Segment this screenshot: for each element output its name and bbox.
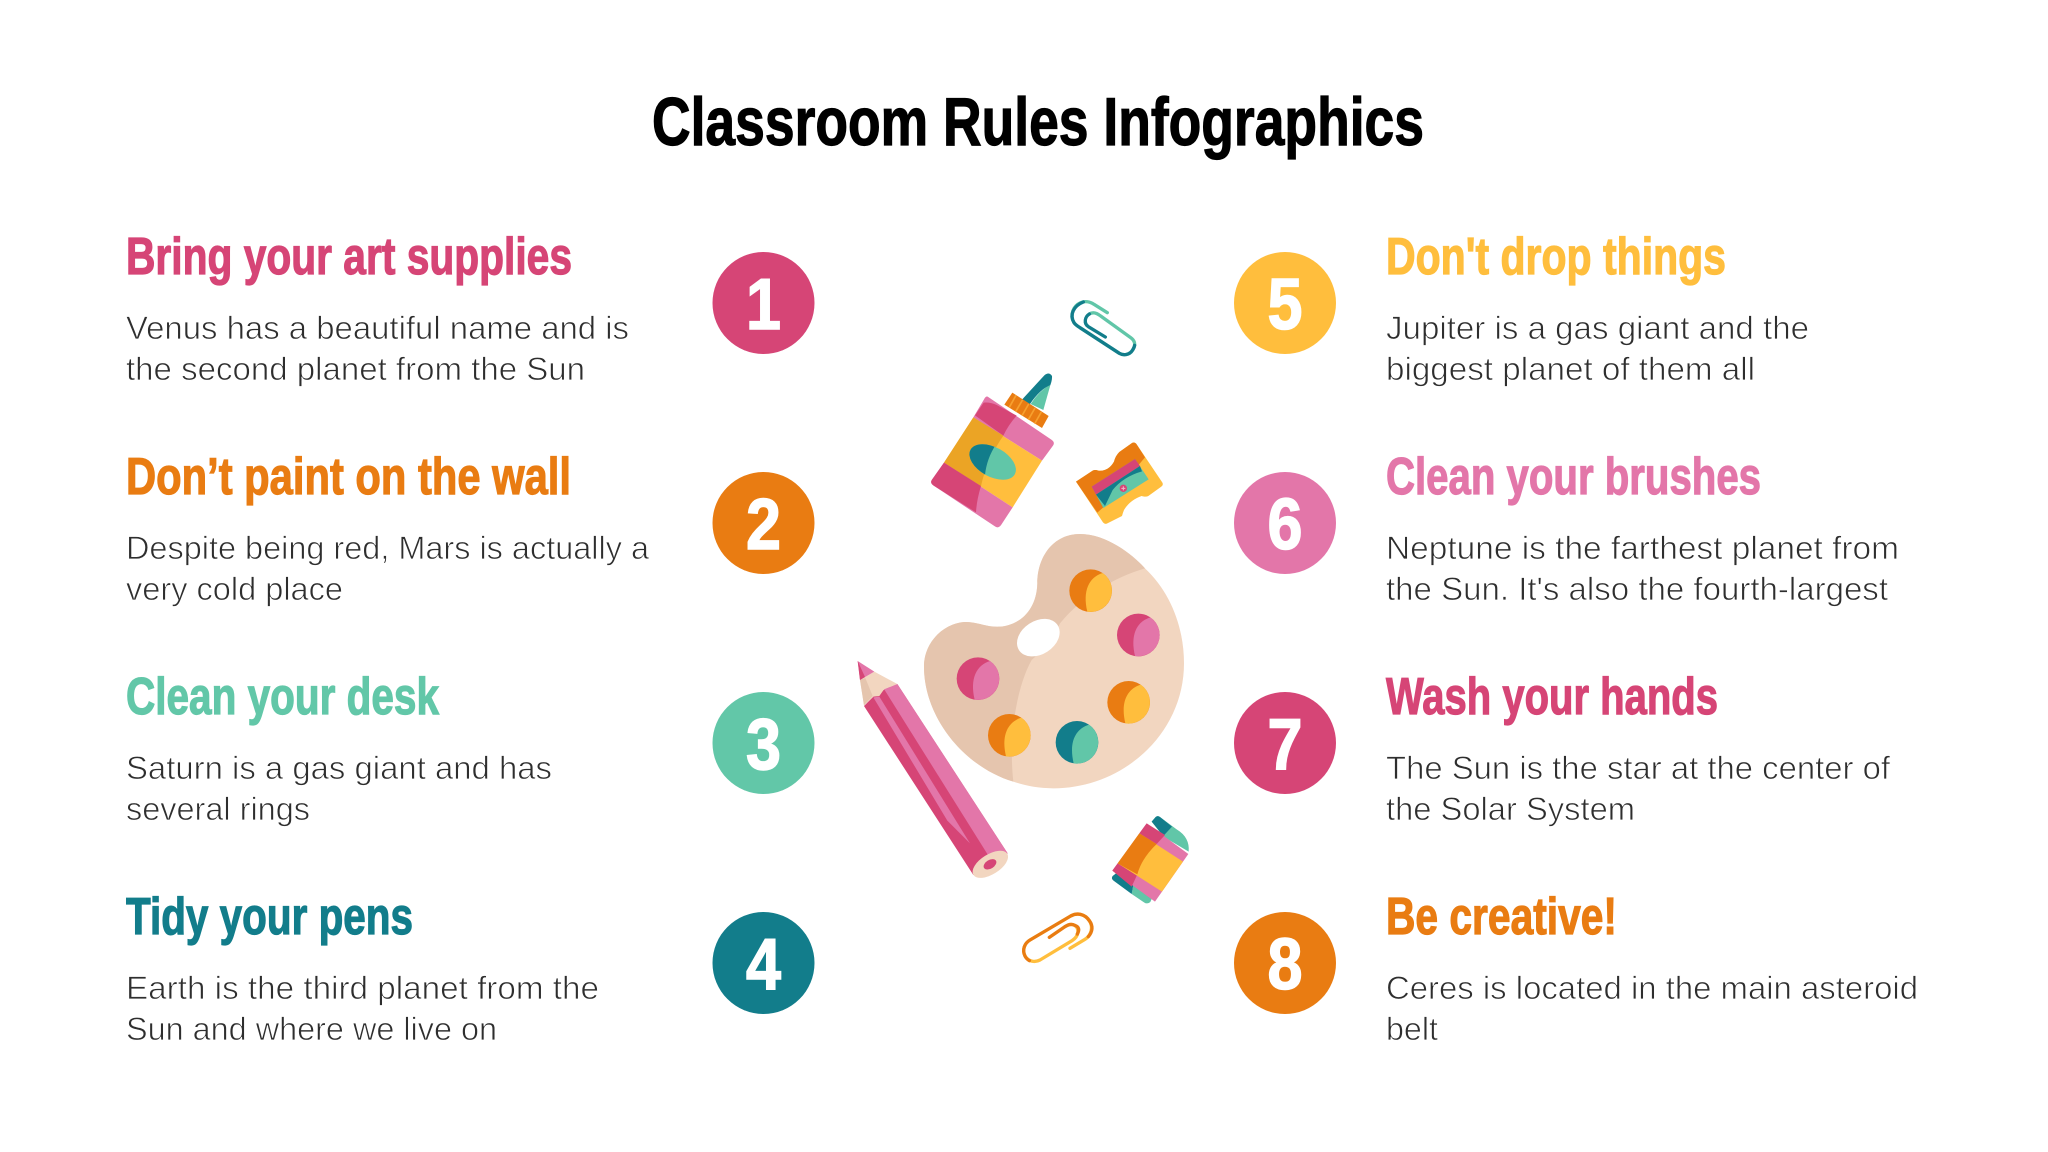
rule 3: Clean your desk: several rings	[126, 791, 310, 827]
rule 5: Don't drop things: 5	[1268, 265, 1302, 345]
rule 1: Bring your art supplies: Venus has a beautiful name and is	[126, 310, 629, 346]
rule 2: Don't paint on the wall: 2	[746, 485, 781, 565]
middle band	[944, 417, 1042, 507]
rule 1: Bring your art supplies: the second planet from the Sun	[126, 351, 585, 387]
icon: pencil sharpener	[1076, 443, 1163, 524]
paint dab: teal	[1056, 721, 1098, 764]
icon: orange paperclip	[1024, 914, 1092, 961]
rule 7: Wash your hands: Wash your hands	[1386, 668, 1718, 726]
rule 4: Tidy your pens: Earth is the third planet from the	[126, 970, 599, 1006]
icon: teal paperclip	[1072, 302, 1135, 355]
rule 3: Clean your desk	[126, 668, 814, 827]
rule 1: Bring your art supplies	[126, 228, 814, 387]
title: Classroom Rules Infographics	[652, 84, 1424, 160]
rule 4: Tidy your pens: Tidy your pens	[126, 888, 413, 946]
rule 5: Don't drop things: Jupiter is a gas giant and the	[1386, 310, 1809, 346]
bottom band	[931, 463, 1013, 527]
rule 3: Clean your desk: Clean your desk	[126, 668, 439, 726]
rule 7: Wash your hands: 7	[1268, 705, 1302, 785]
rule 5: Don't drop things	[1234, 228, 1809, 387]
rule 6: Clean your brushes	[1234, 448, 1899, 607]
rule 8: Be creative!	[1234, 888, 1918, 1047]
paint dab: orange right	[1107, 681, 1150, 724]
icon: eraser	[1112, 816, 1189, 903]
rule 3: Clean your desk: Saturn is a gas giant and has	[126, 750, 552, 786]
rule 8: Be creative!: belt	[1386, 1011, 1438, 1047]
rule 8: Be creative!: Ceres is located in the main asteroid	[1386, 970, 1918, 1006]
paint dab: orange top	[1069, 569, 1112, 612]
rule 7: Wash your hands	[1234, 668, 1890, 827]
rule 2: Don't paint on the wall: Don’t paint on the wall	[126, 448, 571, 506]
paint dab: pink left	[957, 657, 999, 700]
rule 3: Clean your desk: 3	[746, 705, 781, 785]
rule 2: Don't paint on the wall	[126, 448, 814, 607]
palette thumb hole	[1010, 611, 1067, 664]
rule 6: Clean your brushes: the Sun. It's also the fourth-largest	[1386, 571, 1888, 607]
rule 5: Don't drop things: Don't drop things	[1386, 228, 1726, 286]
rule 4: Tidy your pens: 4	[746, 925, 781, 1005]
icon: pink pencil	[858, 661, 1013, 883]
icon: paint palette	[924, 534, 1184, 788]
rule 6: Clean your brushes: 6	[1268, 485, 1302, 565]
nozzle	[1031, 384, 1051, 410]
rule 7: Wash your hands: The Sun is the star at the center of	[1386, 750, 1890, 786]
label oval	[969, 444, 1016, 480]
paint dab: orange bottom	[988, 714, 1031, 757]
rule 4: Tidy your pens: Sun and where we live on	[126, 1011, 497, 1047]
rule 4: Tidy your pens	[126, 888, 814, 1047]
rule 5: Don't drop things: biggest planet of them all	[1386, 351, 1755, 387]
rule 6: Clean your brushes: Clean your brushes	[1386, 448, 1761, 506]
icon: glue bottle	[931, 373, 1054, 527]
top band	[973, 397, 1054, 461]
paint dab: pink right	[1117, 614, 1160, 656]
rule 2: Don't paint on the wall: Despite being red, Mars is actually a	[126, 530, 649, 566]
cap	[1004, 393, 1049, 428]
rule 7: Wash your hands: the Solar System	[1386, 791, 1635, 827]
rule 6: Clean your brushes: Neptune is the farthest planet from	[1386, 530, 1899, 566]
rule 8: Be creative!: Be creative!	[1386, 888, 1617, 946]
rule 2: Don't paint on the wall: very cold place	[126, 571, 343, 607]
rule 1: Bring your art supplies: Bring your art supplies	[126, 228, 572, 286]
rule 8: Be creative!: 8	[1268, 925, 1302, 1005]
rule 1: Bring your art supplies: 1	[746, 265, 781, 345]
